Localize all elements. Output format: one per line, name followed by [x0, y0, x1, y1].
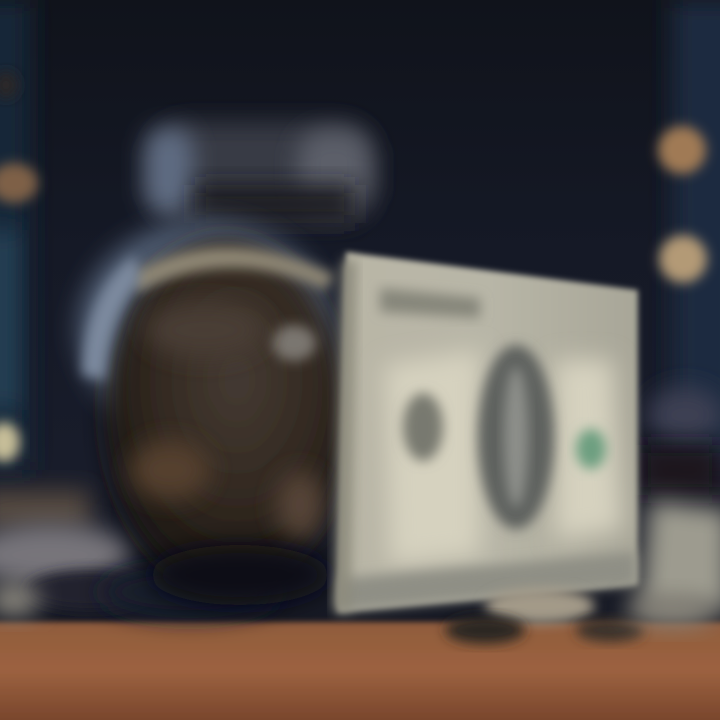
table edge objects right and left: [0, 445, 720, 610]
bill: bottom band: [338, 552, 636, 612]
dollar bill: [334, 252, 638, 612]
bokeh lights: [0, 71, 720, 462]
coins in front of the bill: [445, 588, 718, 644]
jar body: [77, 220, 345, 605]
bill: inner light panel: [385, 350, 480, 565]
bill: left edge: [334, 260, 356, 612]
bill: central portrait: [478, 345, 554, 529]
bill: top band: [380, 288, 480, 318]
bill: green seal: [576, 429, 606, 469]
jar lid: [145, 122, 375, 223]
table top: [0, 622, 720, 720]
bill: left seal: [403, 393, 443, 461]
coins and papers on the left: [0, 523, 280, 618]
